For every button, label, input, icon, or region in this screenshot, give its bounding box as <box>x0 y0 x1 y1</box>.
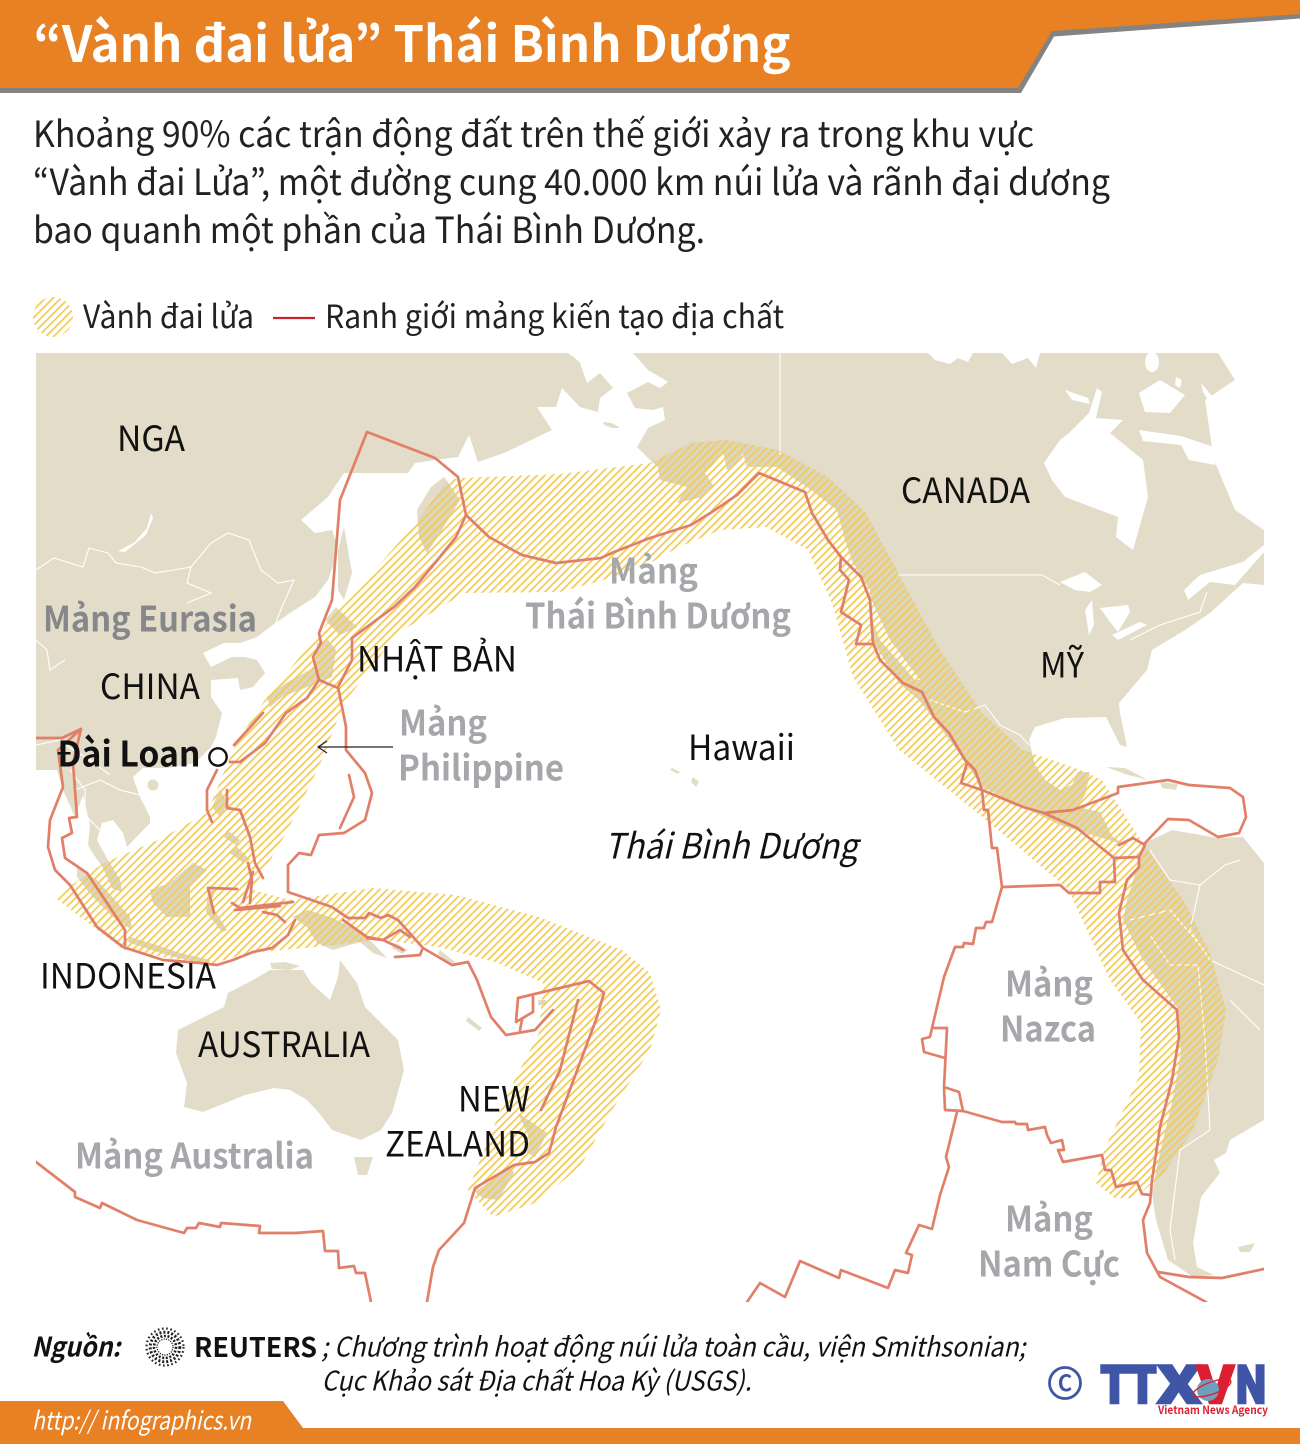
baikal <box>118 513 153 552</box>
icon: Reuters logo <box>146 1328 184 1366</box>
legend: Ranh giới mảng kiến tạo địa chất <box>325 292 784 338</box>
plate labels: Nam Cực <box>978 1236 1120 1288</box>
logo: TTXVN <box>1050 1346 1269 1418</box>
logo: TTXVN: C <box>1058 1366 1072 1398</box>
plate labels: Mảng <box>1005 956 1093 1008</box>
map: borders <box>36 353 1264 1260</box>
country labels: NGA <box>117 411 186 462</box>
hudson bay <box>1044 388 1148 550</box>
plate line: Nazca west <box>932 790 1002 1111</box>
plate labels: Philippine <box>398 740 564 792</box>
plate line: Ryukyu <box>230 680 319 762</box>
land: Australia <box>176 960 404 1140</box>
footer bar <box>0 1401 1300 1444</box>
website url: http:// infographics.vn <box>32 1402 252 1438</box>
plate line: Antarctic ridge west <box>36 1162 371 1302</box>
land: St Lawrence Island <box>603 422 620 428</box>
plate line: New Guinea <box>343 920 403 950</box>
intro text: bao quanh một phần của Thái Bình Dương. <box>33 202 705 254</box>
plate line: Aleutian and North America <box>466 473 1246 843</box>
land: Indonesia and Philippines <box>77 867 132 930</box>
legend <box>33 292 784 338</box>
country labels: INDONESIA <box>40 948 217 1000</box>
country labels: CHINA <box>100 659 201 710</box>
plate labels: Mảng Australia <box>75 1128 314 1180</box>
logo: TTXVN: TT <box>1100 1346 1156 1418</box>
plate labels: Mảng <box>1005 1192 1093 1242</box>
plate line: Sunda trench <box>36 729 295 965</box>
country labels: NEW <box>458 1072 530 1122</box>
land: Asia <box>36 353 613 892</box>
country labels: MỸ <box>1040 638 1084 688</box>
legend: Vành đai lửa <box>83 292 254 338</box>
source credits <box>32 1326 1027 1398</box>
country labels: Hawaii <box>688 720 795 771</box>
country labels: Đài Loan <box>56 726 200 778</box>
plate line: Tonga and New Zealand <box>427 981 604 1302</box>
map: land masses <box>36 353 1264 1277</box>
st lawrence <box>1184 545 1264 600</box>
logo: TTXVN: N <box>1235 1346 1267 1418</box>
plate line: Chile ridge <box>963 1111 1150 1195</box>
lakes and bays <box>118 352 1264 680</box>
plate line: Scotia <box>1158 1269 1264 1278</box>
plate line: Cocos <box>1044 813 1206 1302</box>
header banner <box>0 0 1300 93</box>
plate labels: Mảng <box>609 544 698 594</box>
plate labels: Mảng Eurasia <box>43 592 257 642</box>
land: Hawaii <box>691 777 699 787</box>
land: Sakhalin <box>338 527 352 600</box>
intro text: “Vành đai Lửa”, một đường cung 40.000 km núi lửa và rãnh đại dương <box>33 154 1110 206</box>
country labels: CANADA <box>901 463 1031 514</box>
plate labels <box>43 544 1120 1288</box>
logo: TTXVN: Vietnam News Agency <box>1157 1402 1269 1418</box>
marker: Taiwan <box>209 748 227 766</box>
plate line: Okhotsk <box>313 432 367 688</box>
plate line: Japan and Mariana trench <box>288 432 553 1035</box>
land: South America <box>1123 830 1264 1277</box>
plate labels: Nazca <box>1000 1002 1096 1052</box>
land: Japan <box>325 607 357 635</box>
country labels: NHẬT BẢN <box>357 632 517 682</box>
plate line: South Pacific ridge <box>747 1112 957 1302</box>
source credits: Cục Khảo sát Địa chất Hoa Kỳ (USGS). <box>322 1360 752 1398</box>
land: Hainan <box>148 780 158 790</box>
land: Kamchatka <box>417 477 460 553</box>
plate line: Philippines <box>207 770 217 822</box>
plate labels: Mảng <box>399 696 487 746</box>
land: North America <box>627 353 1264 845</box>
intro text <box>33 106 1110 254</box>
logo: TTXVN: V <box>1197 1346 1234 1418</box>
logo: TTXVN: X <box>1158 1346 1200 1418</box>
title: “Vành đai lửa” Thái Bình Dương <box>34 5 791 77</box>
arrow: Philippine plate <box>318 741 393 753</box>
source credits: Nguồn: <box>32 1326 123 1364</box>
intro text: Khoảng 90% các trận động đất trên thế giới xảy ra trong khu vực <box>33 106 1034 158</box>
source credits: REUTERS <box>194 1326 317 1365</box>
country labels <box>40 411 1084 1168</box>
map: water and borders on land <box>118 353 1264 640</box>
country labels: ZEALAND <box>385 1116 530 1168</box>
source credits: ; Chương trình hoạt động núi lửa toàn cầu, viện Smithsonian; <box>322 1326 1027 1364</box>
gulf of california <box>855 565 920 680</box>
ring of fire hatched band <box>54 440 1226 1217</box>
country labels: AUSTRALIA <box>198 1017 371 1068</box>
land: Caribbean <box>1106 767 1148 780</box>
great lakes <box>1060 572 1102 592</box>
land: New Zealand <box>475 1167 514 1200</box>
country labels: Thái Bình Dương <box>604 818 861 870</box>
map: land darkened under the belt <box>80 440 1226 1200</box>
map: plate boundaries <box>36 432 1264 1302</box>
plate labels: Thái Bình Dương <box>525 588 791 640</box>
